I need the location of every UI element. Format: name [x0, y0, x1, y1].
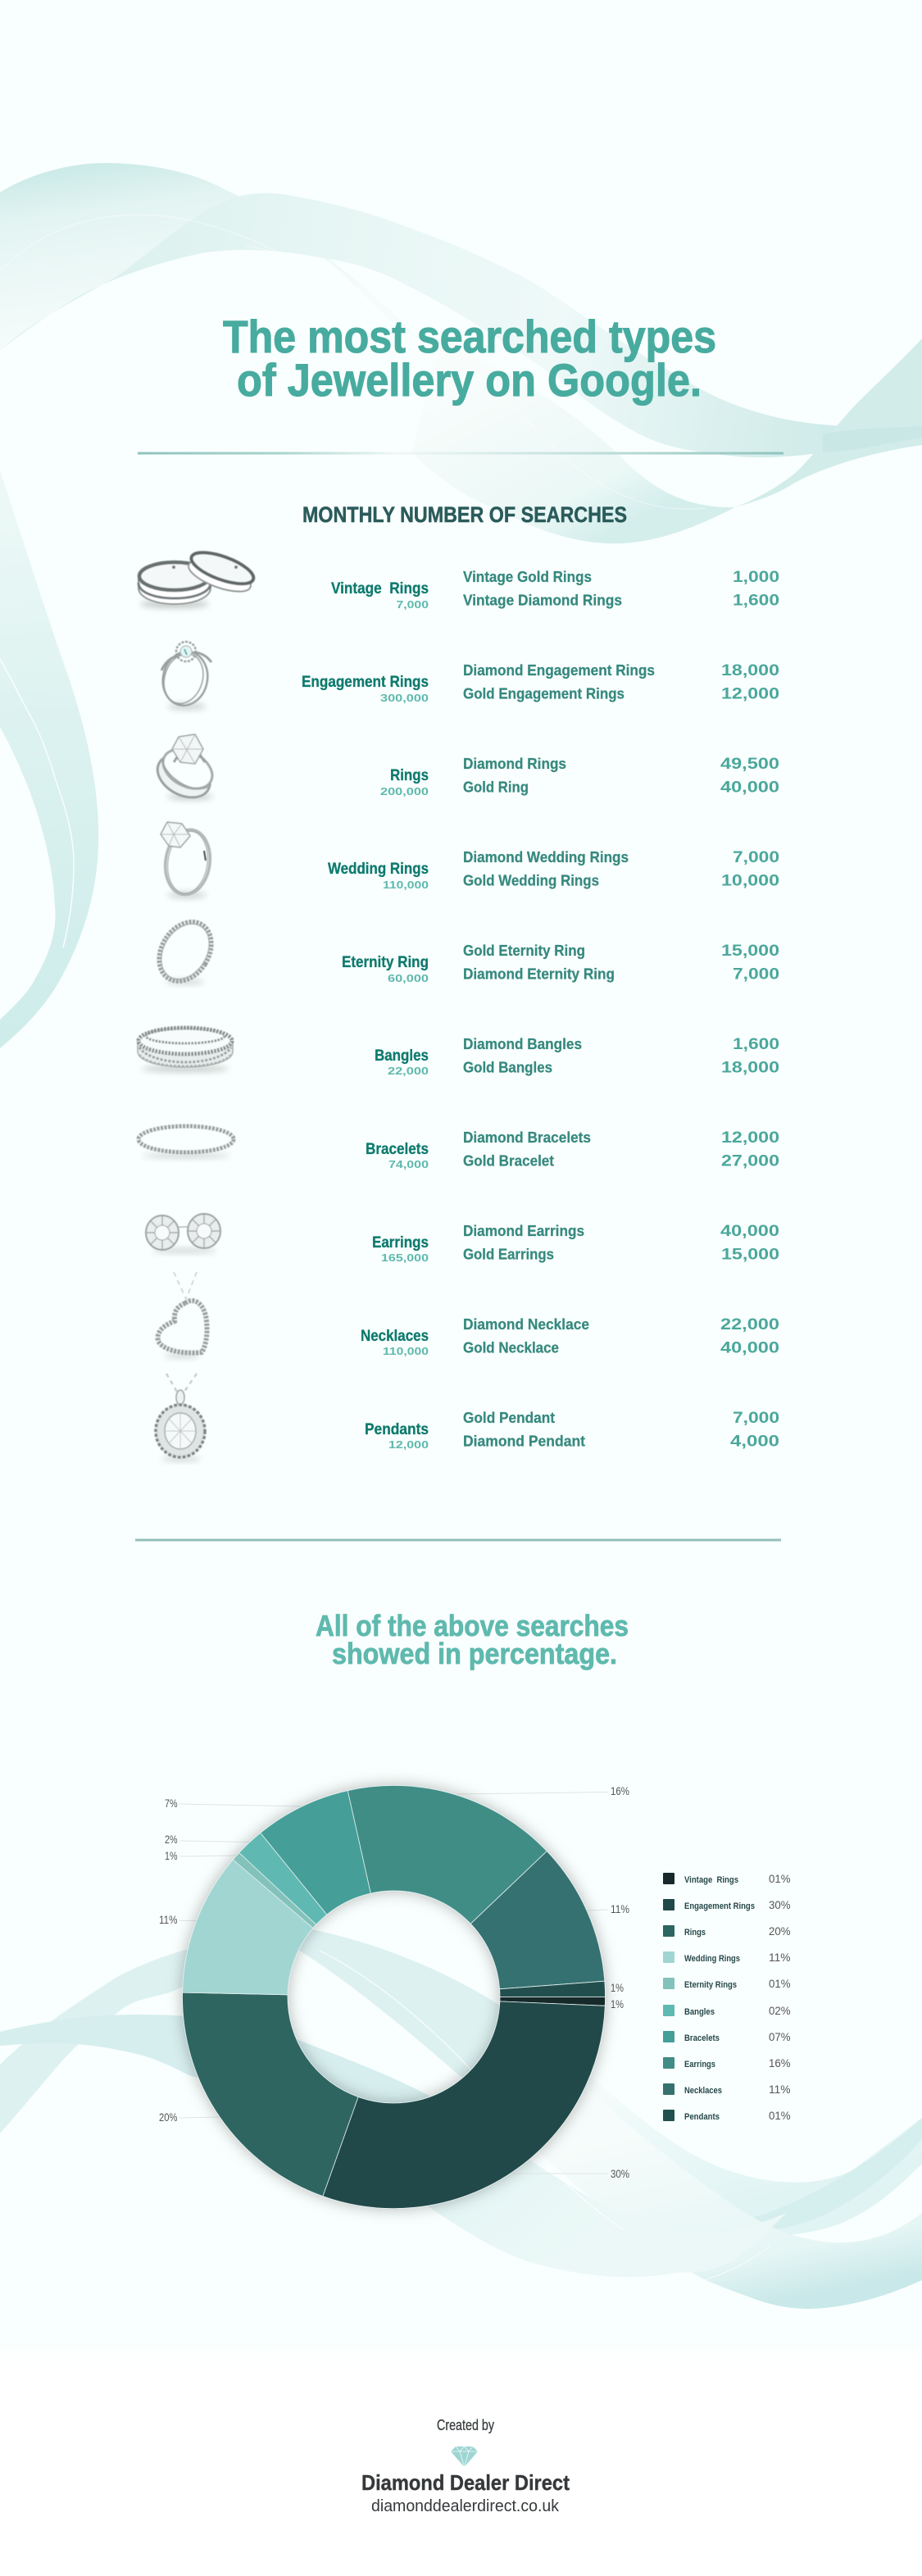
legend: Engagement Rings: 30%: [769, 1898, 790, 1911]
legend: Vintage Rings: Vintage Rings: [684, 1875, 738, 1885]
slice: Pendants 1%: [500, 1981, 606, 1997]
item: Diamond Eternity Ring: Diamond Eternity Ring: [463, 965, 615, 982]
slice: Bangles 2%: [239, 1833, 327, 1924]
category total: 165,000: [381, 1252, 429, 1264]
row: Vintage Rings: [139, 546, 779, 611]
footer credit: [361, 2417, 570, 2515]
legend: Vintage Rings: 01%: [769, 1872, 790, 1885]
chart percentage labels: [159, 1784, 629, 2180]
category total: 300,000: [380, 692, 429, 704]
item: Vintage Gold Rings: 1,000: [733, 569, 779, 586]
icon: tennis bracelet: [139, 1126, 234, 1158]
item: Diamond Engagement Rings: Diamond Engagement Rings: [463, 662, 655, 679]
category total: 74,000: [388, 1158, 429, 1170]
item: Gold Necklace: 40,000: [720, 1339, 779, 1357]
item: Gold Earrings: [463, 1246, 779, 1264]
item: Gold Bracelet: 27,000: [721, 1152, 779, 1170]
icon: diamond stud earrings: [146, 1214, 220, 1253]
item: Diamond Wedding Rings: 7,000: [733, 849, 779, 866]
slice: Rings 20%: [183, 1992, 358, 2197]
legend: Necklaces: [663, 2083, 790, 2096]
item: Diamond Rings: Diamond Rings: [463, 756, 566, 772]
icon: heart necklace: [158, 1272, 207, 1358]
legend: Necklaces: Necklaces: [684, 2086, 722, 2096]
website: diamonddealerdirect.co.uk: [371, 2497, 560, 2515]
category total: 200,000: [380, 785, 429, 797]
donut chart: [183, 1785, 606, 2209]
decorative wave ribbon: left: [0, 470, 98, 1048]
chart legend: [663, 1872, 790, 2122]
item: Diamond Wedding Rings: Diamond Wedding Rings: [463, 849, 629, 865]
item: Diamond Engagement Rings: [463, 662, 779, 679]
legend: Pendants: [663, 2109, 790, 2122]
chart percentage labels: 30%: [611, 2167, 629, 2180]
row: Bracelets: [139, 1126, 779, 1170]
legend: Bangles: [663, 2004, 790, 2017]
item: Diamond Earrings: [463, 1223, 779, 1240]
item: Gold Pendant: [463, 1410, 779, 1427]
slice: Bracelets 7%: [261, 1791, 370, 1915]
row: Engagement Rings: [158, 642, 779, 710]
legend: Eternity Rings: [663, 1977, 790, 1990]
item: Vintage Diamond Rings: [463, 592, 779, 610]
category name: Earrings: [372, 1234, 429, 1252]
category name: Bracelets: [366, 1141, 429, 1158]
legend: Wedding Rings: Wedding Rings: [684, 1954, 740, 1964]
created by: Created by: [437, 2417, 494, 2433]
item: Diamond Rings: [463, 756, 779, 773]
item: Gold Earrings: 15,000: [721, 1246, 779, 1264]
item: Vintage Diamond Rings: 1,600: [733, 592, 779, 610]
slice: Earrings 16%: [347, 1785, 547, 1924]
category name: Vintage Rings: [331, 580, 429, 597]
chart percentage labels: 7%: [165, 1797, 177, 1810]
item: Diamond Necklace: 22,000: [720, 1316, 779, 1333]
row: Wedding Rings: [161, 822, 779, 898]
item: Diamond Eternity Ring: [463, 965, 779, 984]
legend: Rings: Rings: [684, 1928, 706, 1938]
icon: solitaire ring set: [150, 734, 220, 806]
item: Diamond Pendant: Diamond Pendant: [463, 1433, 585, 1449]
item: Vintage Diamond Rings: Vintage Diamond Rings: [463, 592, 622, 608]
legend: Rings: [663, 1924, 790, 1938]
item: Gold Necklace: Gold Necklace: [463, 1339, 559, 1356]
legend: Bracelets: 07%: [769, 2030, 790, 2043]
legend: Wedding Rings: 11%: [769, 1951, 790, 1964]
legend: Rings: 20%: [769, 1924, 790, 1938]
item: Gold Engagement Rings: 12,000: [721, 685, 779, 703]
category total: 60,000: [388, 972, 429, 984]
legend: Earrings: 16%: [769, 2056, 790, 2069]
legend: Bracelets: [663, 2030, 790, 2043]
icon: eternity ring: [148, 912, 222, 991]
item: Diamond Bangles: Diamond Bangles: [463, 1036, 582, 1052]
title: of Jewellery on Google.: [237, 354, 702, 406]
heading: percentage section: showed in percentage.: [332, 1637, 617, 1670]
legend: Engagement Rings: Engagement Rings: [684, 1901, 755, 1911]
item: Gold Bangles: [463, 1059, 779, 1077]
item: Diamond Eternity Ring: 7,000: [733, 965, 779, 984]
heading: percentage section: All of the above searches: [316, 1609, 629, 1642]
item: Gold Engagement Rings: Gold Engagement Rings: [463, 685, 625, 702]
legend: Vintage Rings: [663, 1872, 790, 1885]
row: Rings: [150, 734, 779, 806]
category total: 110,000: [383, 879, 429, 891]
category total: 110,000: [383, 1345, 429, 1357]
item: Diamond Wedding Rings: [463, 849, 779, 866]
chart percentage labels: 20%: [159, 2110, 177, 2124]
item: Diamond Rings: 49,500: [720, 756, 779, 773]
item: Diamond Necklace: Diamond Necklace: [463, 1316, 589, 1333]
slice: Wedding Rings 11%: [183, 1860, 313, 1995]
chart percentage labels: 1%: [611, 1997, 624, 2010]
legend: Bangles: Bangles: [684, 2007, 715, 2017]
category name: Engagement Rings: [302, 674, 429, 691]
legend: Engagement Rings: [663, 1898, 790, 1911]
chart percentage labels: 2%: [165, 1833, 177, 1846]
item: Gold Necklace: [463, 1339, 779, 1357]
icon: pair of wedding bands: [139, 546, 257, 608]
category name: Wedding Rings: [328, 861, 429, 878]
item: Diamond Bracelets: Diamond Bracelets: [463, 1129, 591, 1146]
decorative wave ribbons: bottom: [0, 1928, 922, 2309]
category total: 7,000: [397, 598, 429, 611]
slice: Vintage Rings 1%: [500, 1997, 606, 2006]
legend: Earrings: Earrings: [684, 2060, 715, 2069]
category total: 22,000: [388, 1065, 429, 1077]
item: Diamond Earrings: Diamond Earrings: [463, 1223, 584, 1239]
item: Diamond Bangles: 1,600: [733, 1036, 779, 1053]
item: Gold Earrings: Gold Earrings: [463, 1246, 554, 1262]
item: Diamond Bracelets: 12,000: [721, 1129, 779, 1147]
item: Gold Pendant: 7,000: [733, 1410, 779, 1427]
legend: Pendants: 01%: [769, 2109, 790, 2122]
chart leader lines: [179, 1792, 608, 2174]
item: Diamond Pendant: [463, 1433, 779, 1451]
item: Vintage Gold Rings: [463, 569, 779, 586]
row: Eternity Ring: [148, 912, 779, 991]
chart percentage labels: 1%: [611, 1981, 624, 1994]
legend: Bracelets: Bracelets: [684, 2033, 720, 2043]
legend: Eternity Rings: Eternity Rings: [684, 1980, 737, 1990]
slice: Engagement Rings 30%: [323, 2001, 605, 2209]
category name: Rings: [390, 767, 429, 784]
item: Gold Ring: Gold Ring: [463, 779, 529, 795]
item: Gold Bracelet: [463, 1152, 779, 1170]
icon: diamond bangle: [138, 1028, 233, 1072]
item: Gold Wedding Rings: [463, 872, 779, 890]
item: Gold Bangles: Gold Bangles: [463, 1059, 552, 1075]
item: Diamond Necklace: [463, 1316, 779, 1333]
item: Diamond Bangles: [463, 1036, 779, 1053]
title: The most searched types: [223, 311, 716, 362]
title: [223, 311, 716, 406]
row: Bangles: [138, 1028, 779, 1077]
item: Vintage Gold Rings: Vintage Gold Rings: [463, 569, 592, 585]
decorative wave ribbons: top: [0, 163, 922, 543]
chart percentage labels: 11%: [159, 1913, 177, 1926]
slice: Necklaces 11%: [470, 1851, 605, 1989]
chart percentage labels: 16%: [611, 1784, 629, 1797]
slice: Eternity Rings 1%: [233, 1852, 316, 1928]
item: Gold Eternity Ring: [463, 943, 779, 960]
icon: halo diamond pendant: [156, 1374, 205, 1461]
item: Gold Bangles: 18,000: [721, 1059, 779, 1077]
item: Gold Eternity Ring: 15,000: [721, 943, 779, 960]
icon: halo engagement ring: [158, 642, 212, 710]
category name: Bangles: [375, 1047, 429, 1065]
legend: Necklaces: 11%: [769, 2083, 790, 2096]
item: Gold Wedding Rings: 10,000: [721, 872, 779, 890]
item: Gold Ring: [463, 779, 779, 797]
item: Gold Eternity Ring: Gold Eternity Ring: [463, 943, 585, 959]
row: Pendants: [156, 1374, 779, 1461]
item: Diamond Pendant: 4,000: [730, 1433, 779, 1451]
item: Gold Engagement Rings: [463, 685, 779, 703]
item: Gold Ring: 40,000: [720, 779, 779, 797]
item: Gold Bracelet: Gold Bracelet: [463, 1152, 554, 1169]
legend: Wedding Rings: [663, 1951, 790, 1964]
row: Necklaces: [158, 1272, 779, 1358]
brand name: Diamond Dealer Direct: [361, 2470, 570, 2495]
legend: Earrings: [663, 2056, 790, 2069]
category total: 12,000: [388, 1438, 429, 1451]
icon: diamond logo: [451, 2447, 478, 2467]
legend: Bangles: 02%: [769, 2004, 790, 2017]
heading: percentage section: [316, 1609, 629, 1670]
row: Earrings: [146, 1214, 779, 1264]
category name: Necklaces: [361, 1328, 429, 1345]
item: Gold Pendant: Gold Pendant: [463, 1410, 555, 1426]
item: Diamond Engagement Rings: 18,000: [721, 662, 779, 679]
item: Gold Wedding Rings: Gold Wedding Rings: [463, 872, 599, 888]
item: Diamond Bracelets: [463, 1129, 779, 1147]
category name: Eternity Ring: [342, 954, 429, 971]
legend: Eternity Rings: 01%: [769, 1977, 790, 1990]
chart percentage labels: 1%: [165, 1849, 177, 1862]
item: Diamond Earrings: 40,000: [720, 1223, 779, 1240]
category name: Pendants: [365, 1421, 429, 1438]
legend: Pendants: Pendants: [684, 2112, 720, 2122]
chart percentage labels: 11%: [611, 1902, 629, 1915]
icon: solitaire wedding ring: [161, 822, 214, 898]
heading: monthly number of searches: MONTHLY NUMBER OF SEARCHES: [302, 502, 627, 527]
